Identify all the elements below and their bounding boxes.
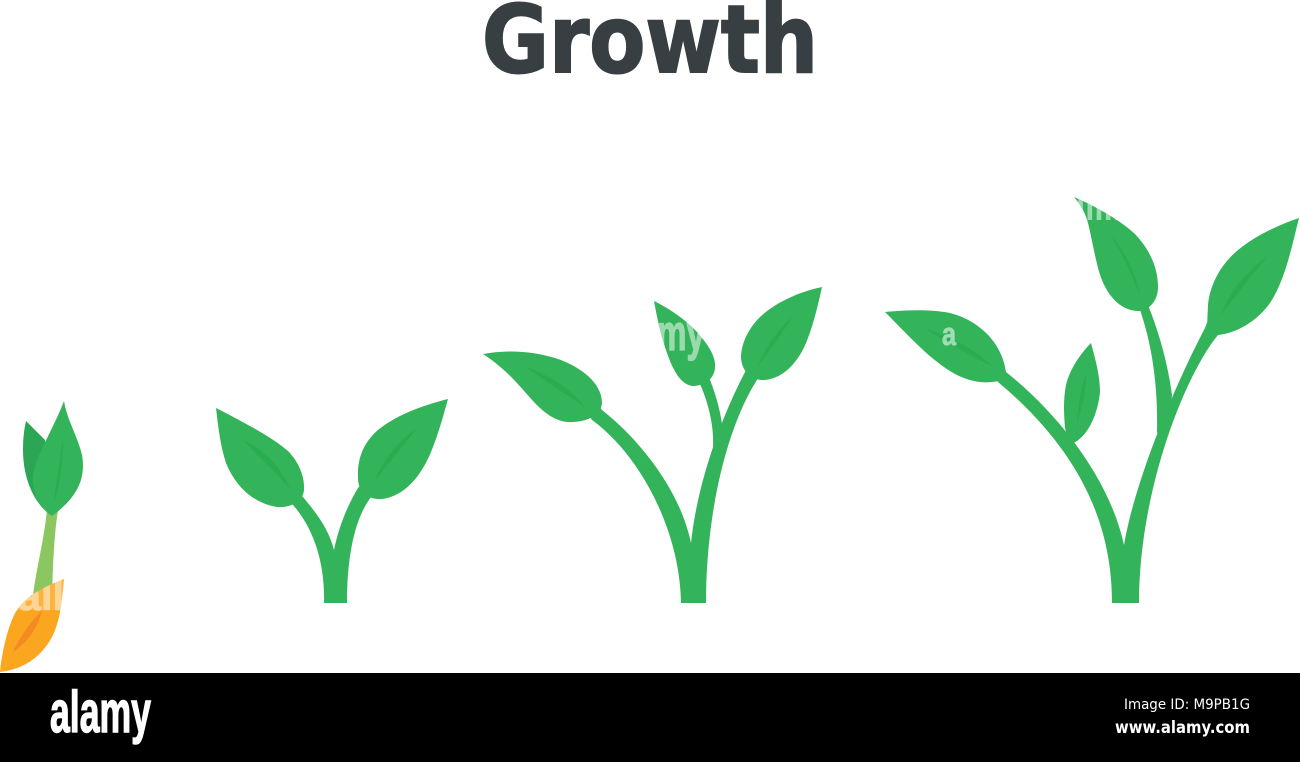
top leaf vein: [1110, 235, 1140, 295]
left leaf: [216, 408, 304, 507]
right leaf vein: [758, 316, 793, 366]
right leaf: [741, 287, 822, 380]
upper branch: [1140, 298, 1172, 440]
sprout front leaf: [33, 401, 83, 516]
small branch: [698, 372, 728, 460]
website: www.alamy.com: [1115, 718, 1250, 738]
plant stage 1: sprouting seed: [0, 401, 83, 672]
plant stage 2: two leaves: [216, 399, 448, 603]
small leaf: [1064, 343, 1100, 445]
top leaf watermark fragment: lllll: [1076, 194, 1122, 227]
left leaf watermark fragment: a: [942, 316, 956, 352]
middle leaf watermark fragment: my: [657, 305, 705, 361]
stem: [285, 480, 375, 603]
middle leaf vein: [690, 358, 700, 378]
left leaf vein: [526, 367, 585, 407]
left leaf: [483, 351, 602, 422]
sprout back leaf: [23, 421, 52, 516]
right leaf vein: [375, 428, 417, 481]
seed: [0, 579, 64, 672]
sprout leaf vein: [54, 438, 63, 503]
plant stage 3: three leaves: [483, 287, 822, 603]
alamy logo: alamy: [50, 680, 151, 745]
middle leaf: [654, 301, 715, 386]
stem: [585, 362, 762, 603]
left leaf vein: [925, 329, 992, 366]
top leaf: [1074, 197, 1158, 311]
small leaf vein: [1077, 373, 1086, 422]
main stem: [990, 315, 1225, 603]
seed watermark fragment: all: [18, 572, 64, 619]
seed watermark fragment: [17, 579, 64, 611]
seed vein: [13, 610, 42, 652]
plant stage 4: four leaves: [885, 194, 1299, 603]
left leaf: [885, 310, 1006, 382]
right leaf vein: [1221, 256, 1268, 315]
sprout stem: [33, 510, 58, 595]
right leaf: [1207, 218, 1299, 335]
right leaf: [358, 399, 448, 499]
footer bar: [0, 673, 1300, 762]
image id: Image ID: M9PB1G: [1124, 697, 1250, 713]
footer background: [0, 673, 1300, 762]
left leaf vein: [243, 440, 290, 489]
